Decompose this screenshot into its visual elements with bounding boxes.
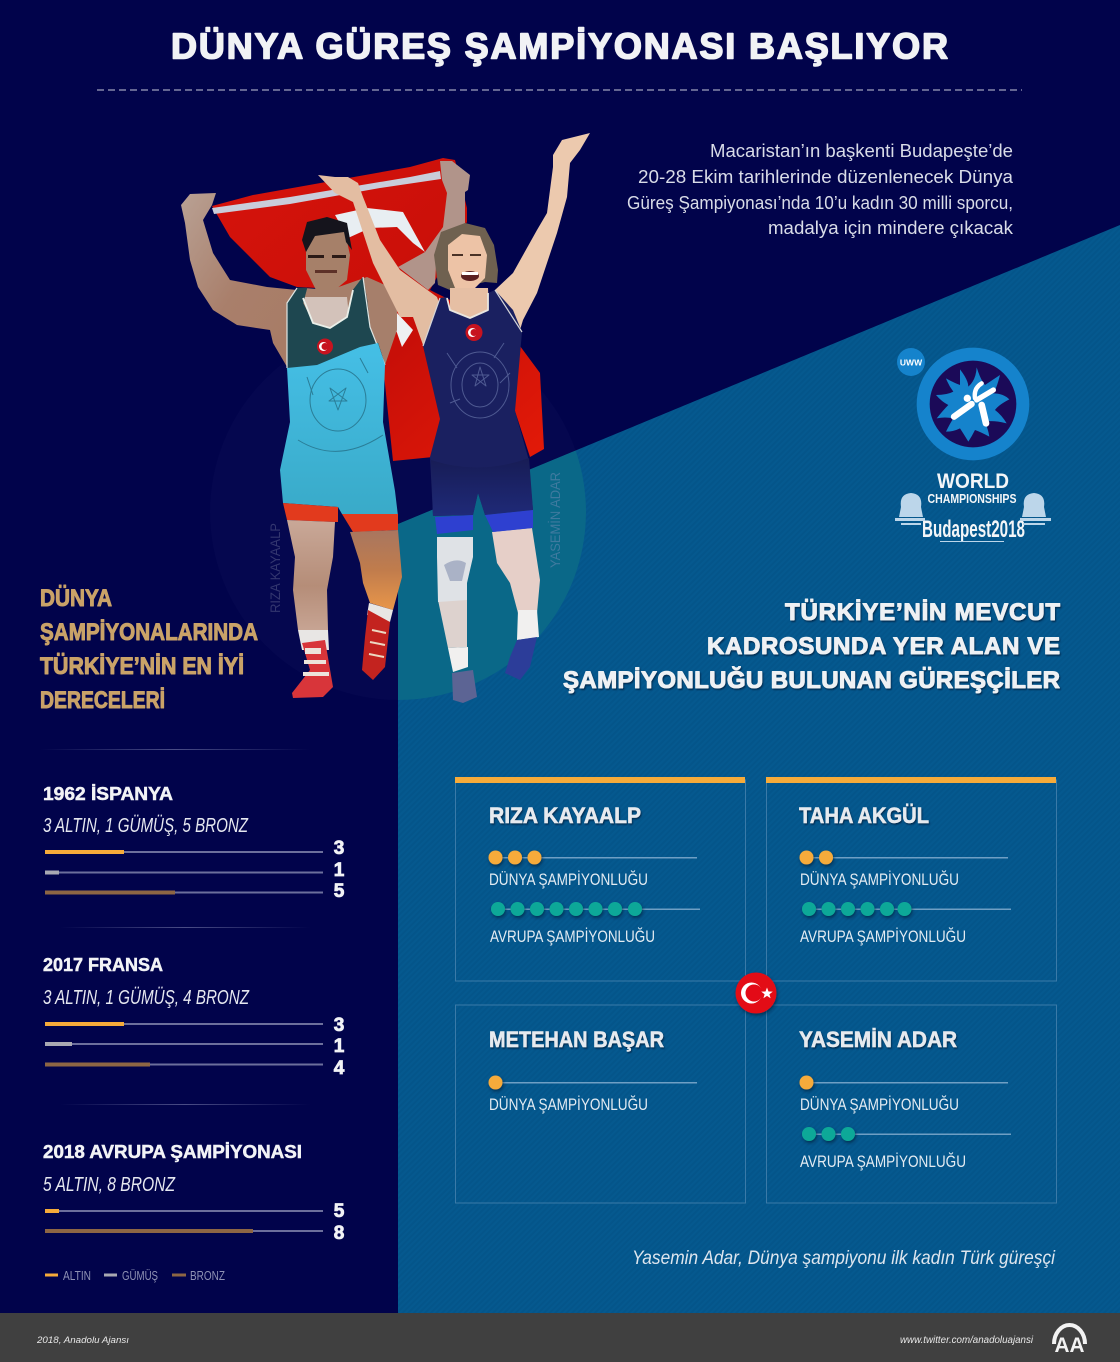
woman socks and shoes [448, 610, 539, 672]
results: 1962 Ispanya: 3 ALTIN, 1 GÜMÜŞ, 5 BRONZ [43, 815, 249, 837]
icon: turkish flag badge [736, 972, 776, 1014]
results: 2018 Avrupa: 5 [334, 1201, 345, 1222]
lions and bars [895, 493, 1051, 542]
card: Taha Akgul: DÜNYA ŞAMPİYONLUĞU [800, 870, 959, 889]
results: 2017 Fransa: 4 [334, 1058, 345, 1079]
card: Yasemin Adar [766, 1005, 1056, 1203]
logo text: Budapest2018 [922, 516, 1025, 543]
background: blue diagonal panel [398, 225, 1120, 1313]
intro paragraph [627, 141, 1014, 238]
anadolu agency logo: AA [1054, 1334, 1084, 1357]
right heading: KADROSUNDA YER ALAN VE [707, 633, 1060, 660]
logo text: CHAMPIONSHIPS [928, 491, 1017, 506]
card: Taha Akgul: AVRUPA ŞAMPİYONLUĞU [800, 927, 966, 946]
results: 2018 Avrupa: 8 [334, 1223, 344, 1244]
title: DÜNYA GÜREŞ ŞAMPİYONASI BAŞLIYOR [171, 26, 948, 66]
card: Riza Kayaalp: AVRUPA ŞAMPİYONLUĞU [490, 927, 655, 946]
logo text: WORLD [937, 470, 1009, 493]
logo text [922, 470, 1025, 543]
left heading: ŞAMPİYONALARINDA [40, 619, 258, 646]
man near arm [181, 193, 300, 372]
intro paragraph: madalya için mindere çıkacak [768, 218, 1014, 238]
athlete name labels [267, 472, 563, 613]
results: 1962 Ispanya: 3 [334, 838, 344, 859]
right heading [563, 599, 1060, 694]
card: Riza Kayaalp: RIZA KAYAALP [489, 803, 641, 828]
results: 2017 Fransa: 2017 FRANSA [43, 955, 163, 975]
left heading [40, 585, 258, 714]
left heading: DÜNYA [40, 585, 112, 612]
woman legs [492, 528, 540, 613]
card: Riza Kayaalp: DÜNYA ŞAMPİYONLUĞU [489, 870, 648, 889]
intro paragraph: Macaristan’ın başkenti Budapeşte’de [710, 141, 1013, 161]
footer url: www.twitter.com/anadoluajansi [900, 1335, 1034, 1346]
flag [212, 158, 544, 461]
results: 2017 Fransa: 3 ALTIN, 1 GÜMÜŞ, 4 BRONZ [43, 987, 250, 1009]
card: Taha Akgul [766, 777, 1056, 981]
background circle behind athletes [398, 450, 586, 700]
intro paragraph: Güreş Şampiyonası’nda 10’u kadın 30 milli sporcu, [627, 193, 1013, 213]
right heading: TÜRKİYE’NİN MEVCUT [785, 599, 1060, 626]
championship logo [895, 348, 1051, 543]
caption: Yasemin Adar, Dünya şampiyonu ilk kadın Türk güreşçi [632, 1248, 1056, 1269]
athlete name labels: RIZA KAYAALP [267, 523, 283, 613]
results: 2017 Fransa: 1 [334, 1036, 345, 1057]
legend: ALTIN [63, 1268, 91, 1283]
card: Riza Kayaalp [455, 777, 746, 981]
results: 1962 Ispanya: 5 [334, 881, 345, 902]
man badge [317, 338, 333, 354]
woman badge [466, 324, 482, 341]
results: 1962 Ispanya: 1962 İSPANYA [43, 784, 173, 804]
man torso skin [300, 277, 397, 365]
footer bar [0, 1313, 1120, 1362]
uww badge: UWW [900, 358, 923, 368]
woman singlet [423, 290, 533, 516]
left heading: DERECELERİ [40, 687, 165, 714]
athletes photo with flag [181, 133, 590, 703]
results: 1962 Ispanya: 1 [334, 860, 345, 881]
man legs [287, 520, 335, 630]
legend: GÜMÜŞ [122, 1268, 158, 1283]
woman head [434, 223, 498, 293]
man far arm [398, 161, 470, 290]
card: Metehan Basar: METEHAN BAŞAR [489, 1027, 664, 1052]
legend: BRONZ [190, 1268, 225, 1283]
card: Metehan Basar: DÜNYA ŞAMPİYONLUĞU [489, 1095, 648, 1114]
man singlet blue [280, 343, 398, 516]
results: 2017 Fransa: 3 [334, 1015, 344, 1036]
man socks and shoes [298, 603, 393, 650]
athlete name labels: YASEMİN ADAR [546, 472, 563, 568]
card: Yasemin Adar: YASEMİN ADAR [799, 1027, 957, 1052]
man shorts bands [283, 503, 398, 532]
card: Metehan Basar [456, 1005, 746, 1203]
woman shorts bands [435, 510, 533, 534]
legend [45, 1268, 225, 1283]
card: Yasemin Adar: DÜNYA ŞAMPİYONLUĞU [800, 1095, 959, 1114]
uww badge [897, 348, 925, 376]
woman chest [450, 288, 489, 318]
man singlet top [287, 277, 385, 370]
card: Taha Akgul: TAHA AKGÜL [799, 803, 929, 828]
card: Yasemin Adar: AVRUPA ŞAMPİYONLUĞU [800, 1152, 966, 1171]
results: 1962 Ispanya [40, 749, 345, 902]
left heading: TÜRKİYE’NİN EN İYİ [40, 653, 244, 680]
footer credit: 2018, Anadolu Ajansı [36, 1335, 129, 1346]
man head [302, 217, 352, 290]
right heading: ŞAMPİYONLUĞU BULUNAN GÜREŞÇİLER [563, 666, 1060, 694]
results: 2018 Avrupa: 2018 AVRUPA ŞAMPİYONASI [43, 1142, 302, 1162]
intro paragraph: 20-28 Ekim tarihlerinde düzenlenecek Dünya [638, 167, 1014, 187]
results: 2018 Avrupa: 5 ALTIN, 8 BRONZ [43, 1174, 176, 1196]
results: 2017 Fransa [43, 927, 345, 1079]
woman arms [318, 133, 590, 345]
man chest [303, 297, 349, 328]
emblem [917, 348, 1029, 460]
woman knee brace [437, 537, 473, 602]
results: 2018 Avrupa [43, 1104, 345, 1244]
